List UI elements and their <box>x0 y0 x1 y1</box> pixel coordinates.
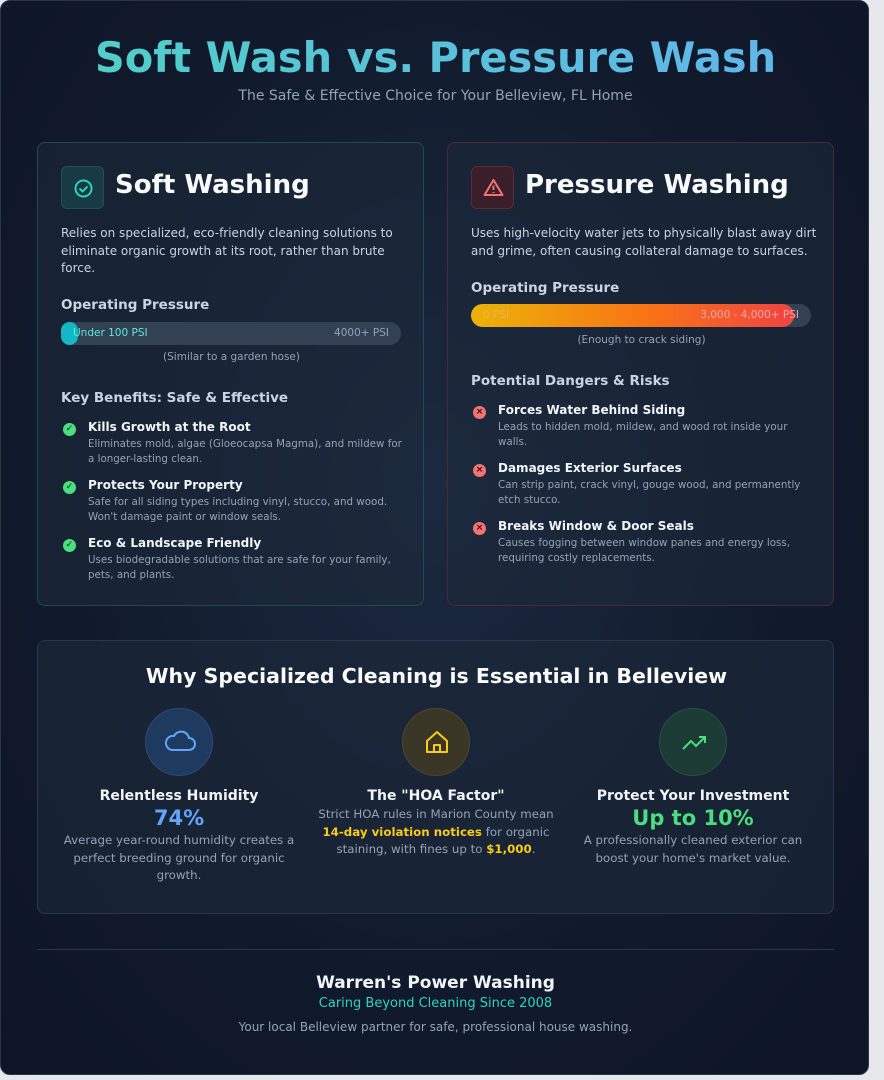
panel: pressure washing: Forces Water Behind Siding <box>498 403 685 417</box>
panel: pressure washing <box>447 142 834 606</box>
stat: investment: Up to 10% <box>632 806 754 830</box>
danger 2 <box>473 461 800 506</box>
panel: soft washing: Safe for all siding types including vinyl, stucco, and wood. Won't damage paint or window seals. <box>88 496 387 523</box>
panel: soft washing: Kills Growth at the Root <box>88 420 251 434</box>
stat: investment: Protect Your Investment <box>597 788 789 804</box>
pressure bar: Under 100 PSI <box>73 327 148 339</box>
panel: soft washing: Uses biodegradable solutions that are safe for your family, pets, and plants. <box>88 554 391 581</box>
panel: pressure washing: Can strip paint, crack vinyl, gouge wood, and permanently etch stucco. <box>498 479 800 506</box>
pressure bar <box>61 322 401 345</box>
heading: Soft Washing <box>115 170 310 200</box>
panel: soft washing: Eliminates mold, algae (Gloeocapsa Magma), and mildew for a longer-lasting clean. <box>88 438 402 465</box>
panel: pressure washing: × <box>476 465 483 475</box>
stat: humidity: Relentless Humidity <box>100 788 258 804</box>
panel: why specialized cleaning <box>37 640 834 914</box>
icon: trend <box>659 708 727 776</box>
stat: investment <box>584 708 802 864</box>
stat: HOA: The "HOA Factor" <box>367 788 505 804</box>
benefit 1 <box>63 420 402 465</box>
footer: Caring Beyond Cleaning Since 2008 <box>319 996 552 1011</box>
footer: Your local Belleview partner for safe, professional house washing. <box>239 1020 632 1034</box>
stat: humidity: Average year-round humidity creates a perfect breeding ground for organic growth. <box>64 833 294 882</box>
stat: humidity <box>64 708 294 882</box>
title: Soft Wash vs. Pressure Wash <box>95 33 776 82</box>
panel: soft washing <box>37 142 424 606</box>
note: (Enough to crack siding) <box>577 334 706 346</box>
panel: pressure washing: × <box>476 523 483 533</box>
panel: pressure washing: Breaks Window & Door Seals <box>498 519 694 533</box>
panel: soft washing: ✓ <box>66 482 73 492</box>
panel: pressure washing: Damages Exterior Surfaces <box>498 461 682 475</box>
icon: warning <box>471 166 514 209</box>
pressure bar: 0 PSI <box>483 309 509 321</box>
heading: Why Specialized Cleaning is Essential in Belleview <box>146 664 727 688</box>
panel: pressure washing: Causes fogging between window panes and energy loss, requiring costly replacements. <box>498 537 790 564</box>
subtitle: The Safe & Effective Choice for Your Belleview, FL Home <box>238 88 633 104</box>
benefit 2 <box>63 478 387 523</box>
stat: HOA <box>318 708 554 856</box>
pressure bar <box>471 304 811 327</box>
icon: house <box>402 708 470 776</box>
panel: soft washing: ✓ <box>66 424 73 434</box>
pressure heading: Operating Pressure <box>61 297 209 313</box>
stat: HOA: Strict HOA rules in Marion County mean 14-day violation notices for organic staining, with fines up to $1,000. <box>318 807 554 856</box>
dangers heading: Potential Dangers & Risks <box>471 373 670 389</box>
description: Relies on specialized, eco-friendly cleaning solutions to eliminate organic growth at its root, rather than brute force. <box>61 226 393 275</box>
description: Uses high-velocity water jets to physically blast away dirt and grime, often causing collateral damage to surfaces. <box>471 226 816 258</box>
footer <box>238 973 632 1034</box>
icon: check circle <box>61 166 104 209</box>
pressure bar: 3,000 - 4,000+ PSI <box>700 309 799 321</box>
danger 3 <box>473 519 790 564</box>
stat: humidity: 74% <box>154 806 204 830</box>
benefit 3 <box>63 536 391 581</box>
stat: investment: A professionally cleaned exterior can boost your home's market value. <box>584 833 802 864</box>
panel: soft washing: Protects Your Property <box>88 478 243 492</box>
icon: cloud <box>145 708 213 776</box>
footer: Warren's Power Washing <box>316 973 555 993</box>
panel: soft washing: Eco & Landscape Friendly <box>88 536 261 550</box>
panel: soft washing: ✓ <box>66 540 73 550</box>
pressure bar: 4000+ PSI <box>334 327 389 339</box>
panel: pressure washing: × <box>476 407 483 417</box>
pressure heading: Operating Pressure <box>471 280 619 296</box>
danger 1 <box>473 403 788 448</box>
benefits heading: Key Benefits: Safe & Effective <box>61 390 288 406</box>
note: (Similar to a garden hose) <box>163 351 300 363</box>
heading: Pressure Washing <box>525 170 789 200</box>
panel: pressure washing: Leads to hidden mold, mildew, and wood rot inside your walls. <box>498 421 787 448</box>
